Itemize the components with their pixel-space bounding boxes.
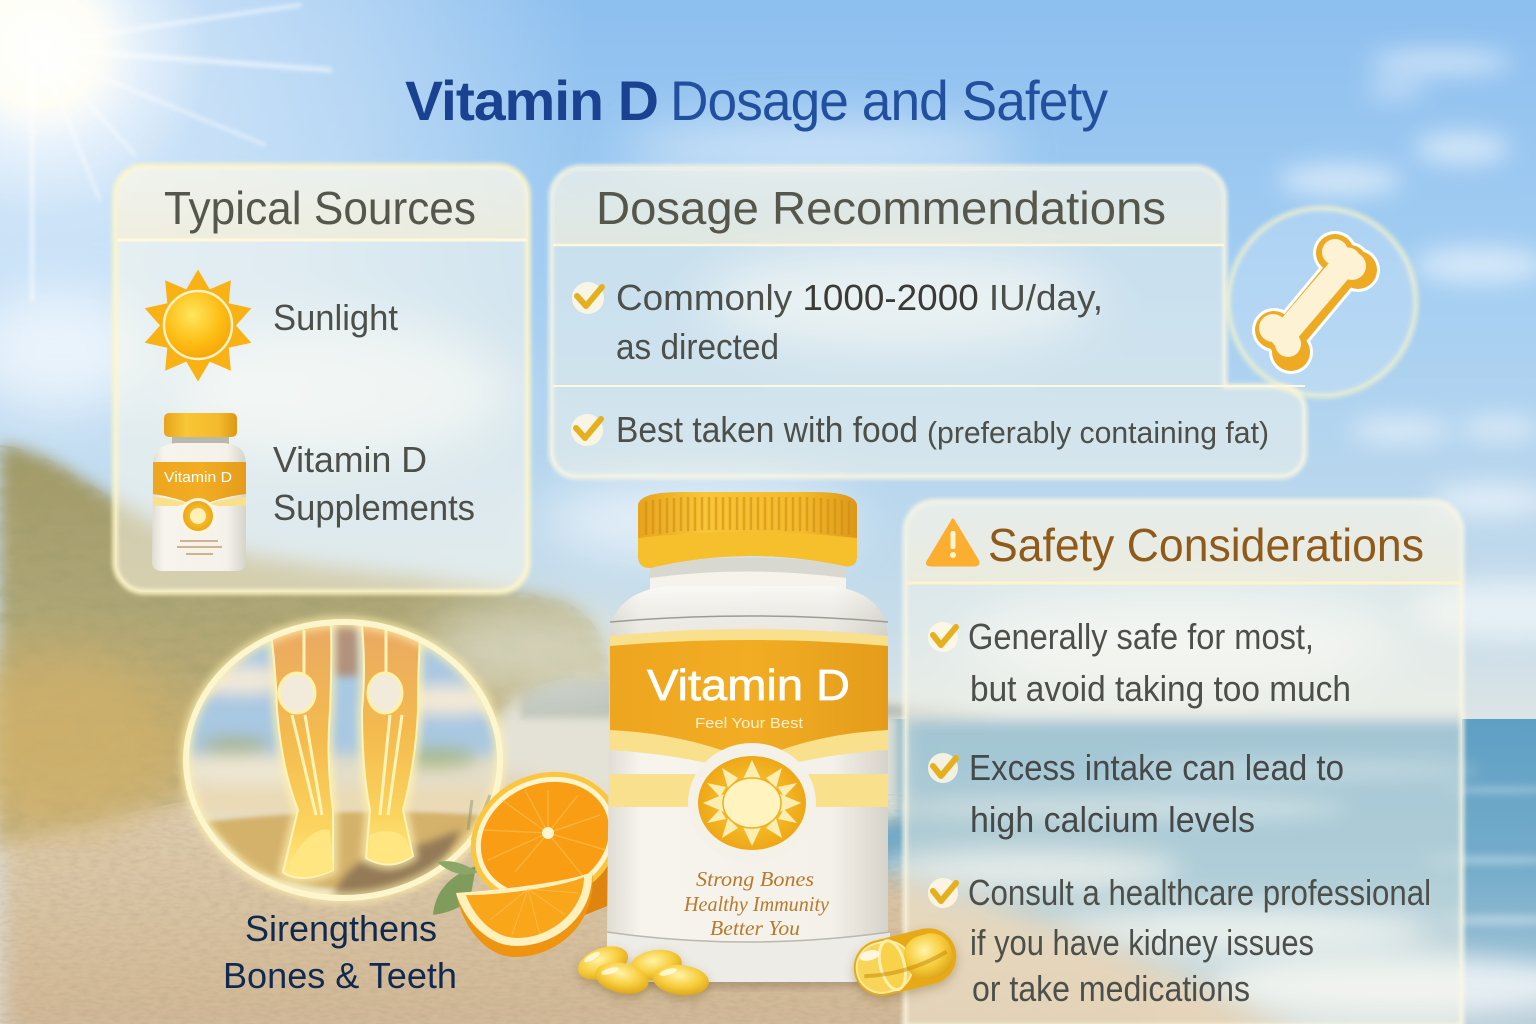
item: excess intake: Excess intake can lead to [969,747,1344,788]
heading: dosage recommendations: Dosage Recommendations [596,182,1166,234]
item: consult professional: if you have kidney issues [970,922,1314,963]
item: take with food [571,409,1269,450]
title: Vitamin D [405,69,658,132]
illustration: softgel capsules [573,940,710,998]
caption: strengthens bones and teeth [223,908,457,996]
item: excess intake: high calcium levels [970,799,1255,840]
sea [880,719,1536,1024]
panel: dosage recommendations [546,162,1310,482]
label: sunlight: Sunlight [273,297,398,338]
bottle label text: Strong Bones [696,867,814,891]
hill [0,445,610,850]
bottle label text: Vitamin D [647,661,850,710]
item: generally safe [928,616,1351,709]
illustration: main vitamin d bottle [600,492,900,988]
item: daily dose [572,277,1103,367]
bottle label text: Better You [710,916,800,940]
icon: bone in bubble [1228,208,1416,396]
icon: small supplement bottle [152,413,246,571]
heading: safety considerations: Safety Considerations [988,519,1424,571]
label: vitamin d supplements: Vitamin D [273,439,427,480]
bottle sun seal [688,743,816,863]
item: generally safe: but avoid taking too much [970,668,1351,709]
panel: typical sources [110,160,534,598]
item: generally safe: Generally safe for most, [968,616,1314,657]
item: consult professional: or take medications [972,968,1250,1009]
icon: small supplement bottle: Vitamin D [164,470,232,486]
caption: strengthens bones and teeth: Bones & Teeth [223,955,457,996]
icon: warning triangle [927,520,978,565]
label: vitamin d supplements: Supplements [273,487,475,528]
icon: sun [145,270,251,382]
title [405,69,1108,132]
bottle label text [647,661,850,940]
sand [0,770,1300,1024]
sun glow [0,0,210,218]
item: take with food: (preferably containing fat) [927,415,1269,450]
label: vitamin d supplements [273,439,475,528]
heading: typical sources: Typical Sources [164,182,476,234]
illustration: orange slices and leaves [433,749,640,957]
bottle label text: Healthy Immunity [683,892,830,916]
bottle cap [638,492,857,594]
bottle label text: Feel Your Best [695,715,804,732]
item: take with food: Best taken with food [616,409,918,450]
item: daily dose: Commonly 1000-2000 IU/day, [616,277,1103,318]
caption: strengthens bones and teeth: Sirengthens [245,908,437,949]
illustration: glowing leg bones [180,618,510,905]
item: daily dose: as directed [616,326,779,367]
title: Dosage and Safety [670,69,1108,132]
panel: safety considerations [900,496,1468,1024]
item: excess intake [928,747,1344,840]
item: consult professional: Consult a healthcare professional [968,872,1431,913]
illustration: large open capsule [848,922,962,1002]
item: consult professional [928,872,1431,1009]
